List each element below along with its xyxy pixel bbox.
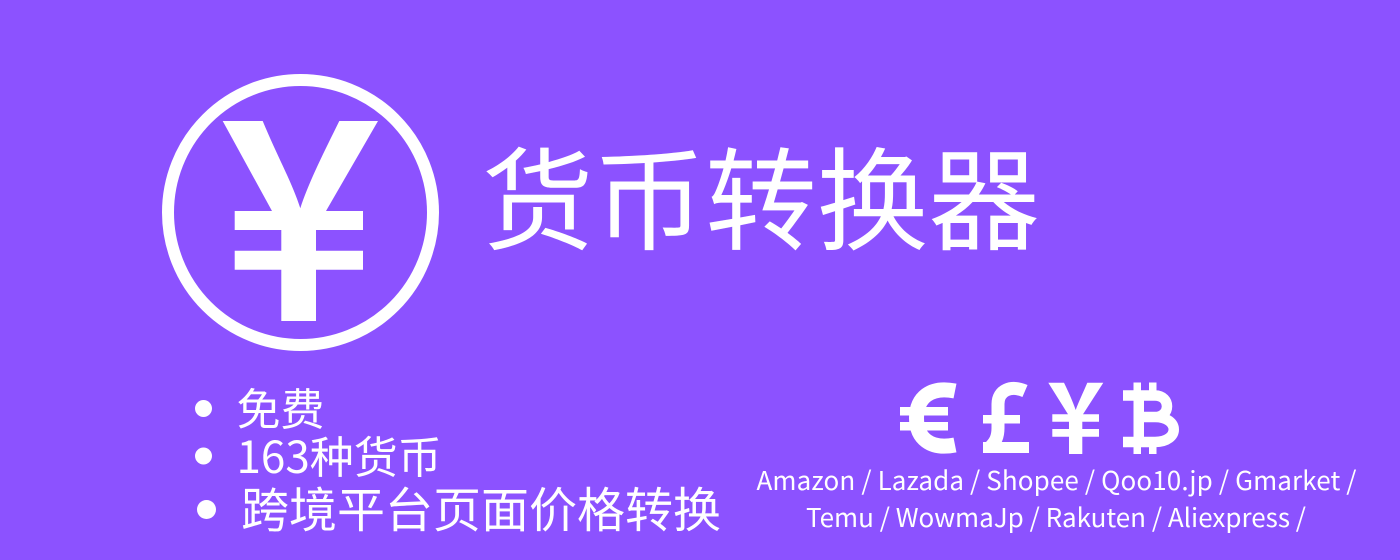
bullet: free: 免费 (236, 374, 324, 438)
bullet: free (195, 374, 324, 438)
feature list (195, 374, 721, 541)
platform list (756, 461, 1356, 535)
icon: yen (1048, 383, 1103, 454)
bullet: cross-border price conversion: 跨境平台页面价格转换 (241, 471, 721, 541)
title: 货币转换器 (482, 113, 1040, 274)
icon: pound (983, 389, 1029, 453)
platforms line 1: Amazon / Lazada / Shopee / Qoo10.jp / Gmarket / (756, 461, 1356, 498)
bullet: 163 currencies: 163种货币 (236, 422, 442, 486)
icon: bitcoin (1123, 382, 1174, 454)
icon: yen coin (168, 80, 433, 345)
icon: euro (900, 390, 955, 446)
platforms line 2: Temu / WowmaJp / Rakuten / Aliexpress / (806, 498, 1306, 535)
icons: currency symbols (900, 382, 1174, 454)
